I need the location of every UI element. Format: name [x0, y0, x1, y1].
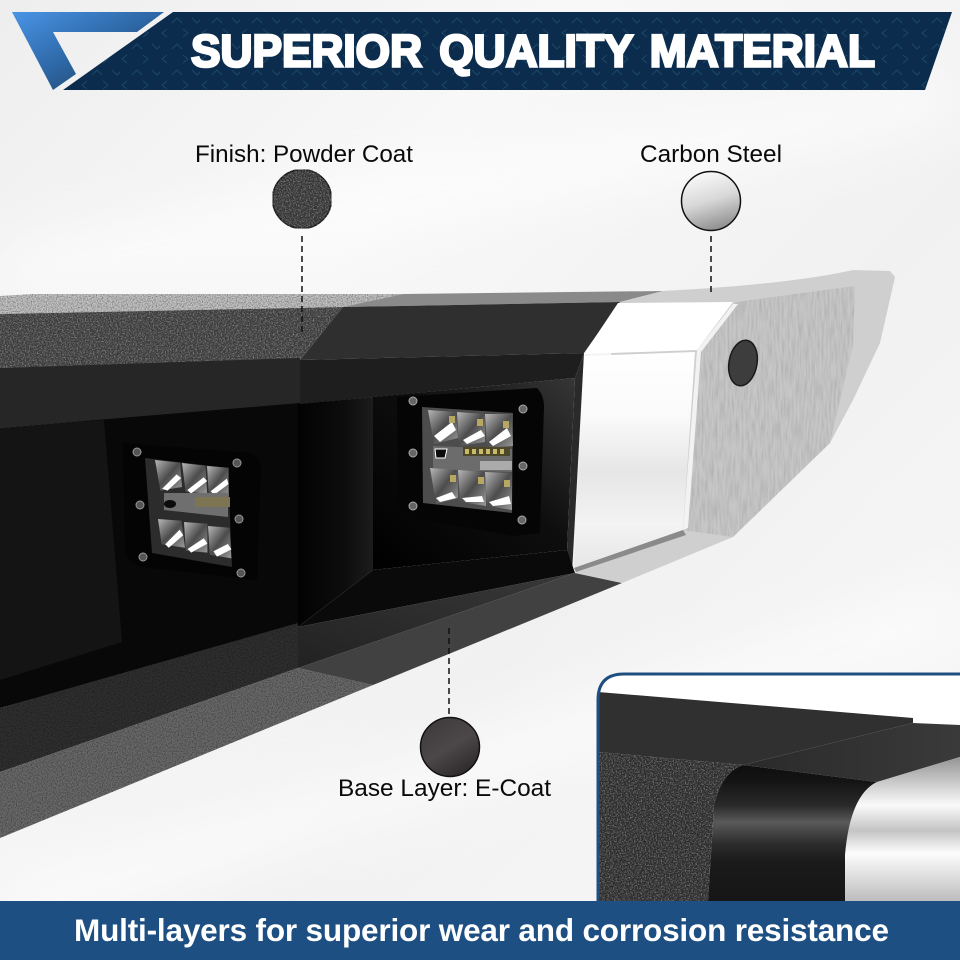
bumper illustration: [0, 270, 895, 838]
footer banner: [0, 901, 960, 960]
carbon steel leader line: [710, 236, 712, 294]
inset powder coat surface: [598, 752, 743, 901]
inset e-coat band: [708, 765, 877, 901]
inset e-coat top: [743, 723, 960, 782]
powder coat swatch: [272, 170, 332, 228]
carbon steel label: Carbon Steel: [640, 141, 782, 168]
powder coat label: Finish: Powder Coat: [195, 141, 413, 168]
callout: e-coat: [338, 628, 551, 802]
e-coat section: [298, 291, 663, 685]
header ribbon: [12, 12, 952, 90]
callout: powder coat: [195, 141, 413, 335]
inset: layer close-up: [598, 674, 960, 901]
steel bolt plug: [725, 338, 761, 388]
powder coat leader line: [301, 236, 303, 335]
title band: [63, 12, 952, 90]
inset steel: [845, 757, 960, 901]
carbon steel section: [574, 270, 895, 583]
e-coat label: Base Layer: E-Coat: [338, 775, 551, 802]
icon: blue angular logo mark: [12, 12, 164, 90]
powder coat section: [0, 294, 403, 838]
e-coat leader line: [448, 628, 450, 716]
title: SUPERIOR QUALITY MATERIAL: [191, 26, 875, 76]
left LED work light: [123, 443, 261, 580]
e-coat swatch: [420, 718, 480, 776]
footer text: Multi-layers for superior wear and corrosion resistance: [74, 912, 889, 948]
callout: carbon steel: [640, 141, 782, 294]
right LED work light: [397, 388, 544, 536]
carbon steel swatch: [682, 172, 740, 230]
inset powder coat top: [598, 692, 913, 765]
